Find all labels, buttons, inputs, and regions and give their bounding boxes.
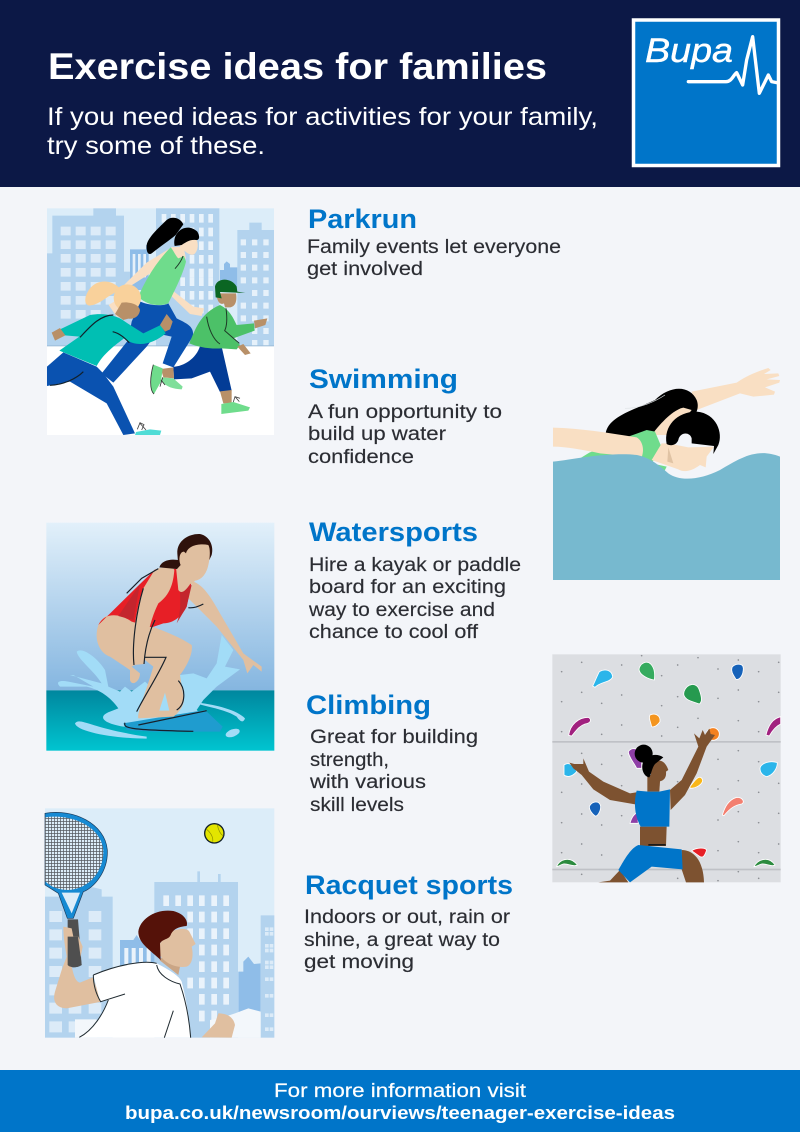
section: Swimming: build up water [308,424,447,445]
subtitle [47,103,598,160]
section: Watersports: Hire a kayak or paddle [309,555,521,576]
section: Climbing [306,690,478,816]
header banner [0,0,800,187]
illustration: swimming [553,368,780,580]
section: Watersports: way to exercise and [308,600,495,621]
footer banner [0,1070,800,1132]
section: Racquet sports [304,870,513,973]
section: Climbing: strength, [310,750,389,771]
section: Climbing: skill levels [310,795,404,816]
section: Racquet sports: get moving [304,952,414,973]
section: Watersports: chance to cool off [309,622,479,643]
far arm [187,582,262,673]
torso and head [176,567,197,592]
swimsuit [98,568,192,627]
section: Racquet sports: shine, a great way to [304,930,500,951]
woman [124,247,173,287]
section: Swimming: Swimming [309,364,458,394]
footer banner: bupa.co.uk/newsroom/ourviews/teenager-exercise-ideas [125,1102,675,1123]
section: Watersports: board for an exciting [309,577,506,598]
section: Climbing: Climbing [306,690,431,720]
section: Swimming: confidence [308,447,414,468]
section: Racquet sports: Indoors or out, rain or [304,907,511,928]
illustration: watersports [46,523,274,751]
girl [85,281,120,305]
legs [97,615,192,718]
Bupa logo [634,20,778,166]
section: Parkrun: Parkrun [308,204,417,234]
section: Parkrun: get involved [307,259,423,280]
title: Exercise ideas for families [48,46,547,87]
section: Watersports [308,517,521,643]
Bupa logo: Bupa [645,32,733,70]
illustration: parkrun family running [47,208,274,435]
section: Watersports: Watersports [309,517,478,547]
section: Climbing: with various [309,772,426,793]
illustration: racquet sports [45,808,274,1038]
subtitle: If you need ideas for activities for your family, [47,103,598,131]
footer banner: For more information visit [274,1081,527,1102]
racquet [45,812,107,918]
section: Climbing: Great for building [310,727,478,748]
section: Swimming: A fun opportunity to [308,402,502,423]
section: Swimming [308,364,502,468]
section: Parkrun: Family events let everyone [307,237,561,258]
subtitle: try some of these. [47,132,265,160]
section: Racquet sports: Racquet sports [305,870,513,900]
section: Parkrun [307,204,561,280]
boy [173,346,232,392]
illustration: climbing wall [552,654,781,882]
